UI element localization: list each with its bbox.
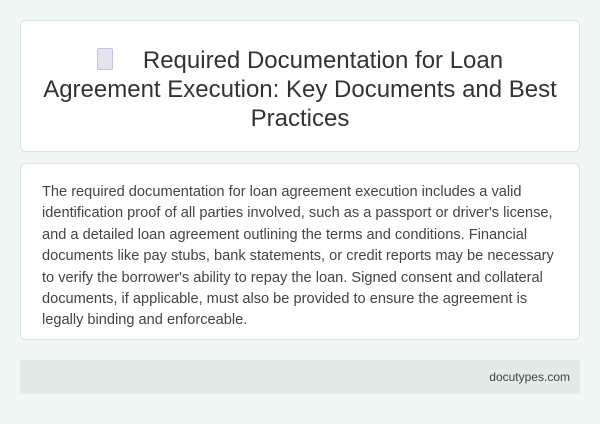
title: Required Documentation for Loan [143, 47, 503, 74]
text block: documents, if applicable, must also be provided to ensure the agreement is [42, 291, 527, 307]
footer [20, 360, 580, 394]
title: Practices [251, 105, 349, 132]
text block: and a detailed loan agreement outlining the terms and conditions. Financial [42, 227, 527, 243]
text block [42, 184, 554, 328]
panel: title card [20, 20, 580, 152]
text block: to verify the borrower's ability to repay the loan. Signed consent and collateral [42, 270, 543, 286]
title: Agreement Execution: Key Documents and Best [43, 76, 557, 103]
text block: The required documentation for loan agreement execution includes a valid [42, 184, 521, 200]
icon: document [97, 48, 113, 70]
title [43, 47, 557, 132]
text block: documents like pay stubs, bank statements, or credit reports may be necessary [42, 248, 554, 264]
footer text: docutypes.com [489, 370, 570, 384]
text block: identification proof of all parties involved, such as a passport or driver's license, [42, 205, 553, 221]
text block: legally binding and enforceable. [42, 312, 247, 328]
panel: description [20, 163, 580, 340]
